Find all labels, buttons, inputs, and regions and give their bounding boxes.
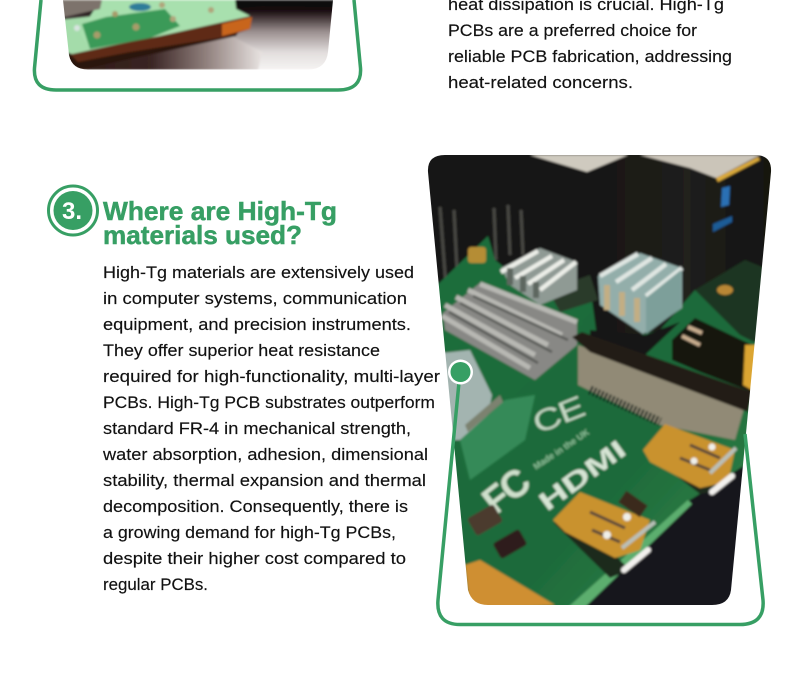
small print: Made in the UK [532,427,591,472]
heading: Where are High-Tg [103,196,337,226]
pale top wedge left [530,155,628,172]
pale top wedge right [640,155,760,178]
body text: High-Tg materials uses [102,264,441,594]
HDMI port upper [643,424,736,494]
blue strip [713,216,732,232]
frame: lower outline around top photo [34,0,361,90]
photo: circuit board with heat sinks and HDMI ports [425,150,775,610]
body text: High-Tg materials uses: despite their higher cost compared to [103,550,406,568]
heat sink top left [501,248,577,305]
body text: High-Tg materials uses: decomposition. Consequently, there is [103,498,408,516]
body text: High-Tg materials uses: in computer systems, communication [103,290,407,308]
light trace connector left [465,395,503,432]
FC logo: FC [475,460,539,523]
text block: top paragraph end: PCBs are a preferred choice for [448,22,698,40]
body text: High-Tg materials uses: standard FR-4 in mechanical strength, [103,420,411,438]
reflective board patch [460,395,535,480]
silver socket pins [682,327,702,345]
number badge 3 [48,186,98,235]
photo: PCB corner close-up [60,0,340,70]
board dark upper background [428,155,772,336]
body text: High-Tg materials uses: High-Tg materials are extensively used [103,264,414,282]
body text: High-Tg materials uses: water absorption, adhesion, dimensional [102,446,428,464]
text block: top paragraph end: heat-related concerns. [448,74,633,92]
black socket right [672,318,752,392]
gold pads [717,285,733,295]
ribbon connector dark frame [572,332,752,412]
components between sinks [548,275,598,312]
board far right region [696,260,762,343]
yellow component right [741,342,754,392]
body text: High-Tg materials uses: PCBs. High-Tg PCB substrates outperform [103,394,435,412]
yellow pad on left [468,247,486,263]
body text: High-Tg materials uses: regular PCBs. [103,576,208,594]
body text: High-Tg materials uses: required for high-functionality, multi-layer [103,368,441,386]
pins row [590,390,660,422]
header pins [438,204,526,279]
body text: High-Tg materials uses: equipment, and precision instruments. [103,316,411,334]
heading: materials used? [103,220,302,250]
black fabric surface [592,465,743,605]
HDMI port lower [553,492,655,578]
number badge 3: 3. [62,198,82,225]
gold edge [716,157,760,182]
CE logo: CE [528,390,589,440]
body text: High-Tg materials uses: a growing demand for high-Tg PCBs, [103,524,396,542]
body text: High-Tg materials uses: stability, thermal expansion and thermal [103,472,426,490]
heat sink large flat [442,283,577,380]
chip below heat sink [590,322,680,358]
HDMI logo: HDMI [533,434,631,517]
green circuit board [430,236,770,610]
ribbon connector beige [578,345,745,440]
pale green board edge [565,500,692,610]
frame: outline around lower photo with dot [438,360,763,624]
text block: top paragraph end [448,0,732,92]
heat sink top right [598,253,682,334]
ribbon connector light strip [595,347,742,408]
orange port bottom left [465,560,555,610]
heading [103,196,337,250]
SMD components [467,491,648,559]
heat sink small left [445,348,494,442]
blue component [721,186,730,207]
text block: top paragraph end: reliable PCB fabrication, addressing [448,48,732,66]
body text: High-Tg materials uses: They offer superior heat resistance [103,342,380,360]
